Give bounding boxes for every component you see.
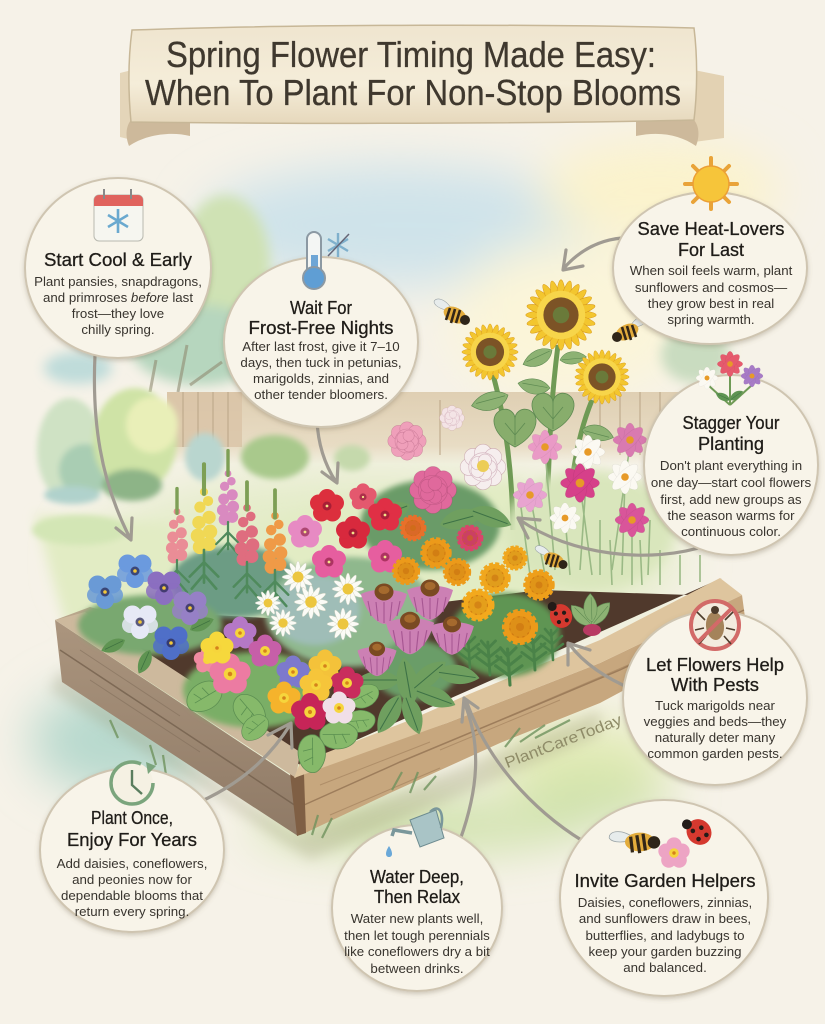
background tree: [44, 195, 729, 385]
body text: spring warmth.: [667, 312, 755, 327]
heading: For Last: [678, 239, 744, 260]
icon: clock with green arrow: [111, 762, 156, 804]
tree trunk: [150, 345, 222, 392]
heading: [67, 807, 197, 850]
scene wash: sky, trees, fence and lawn: [30, 140, 780, 853]
bed ground shadow: [50, 670, 600, 860]
banner right tail: [694, 70, 724, 142]
body text: other tender bloomers.: [254, 387, 388, 402]
body text: and primroses before last: [43, 290, 193, 305]
marigold foliage: [458, 629, 563, 685]
right wood side: [294, 595, 746, 833]
panel: start cool and early: [25, 178, 211, 358]
heading: Frost-Free Nights: [248, 317, 394, 338]
body text: Tuck marigolds near: [655, 698, 776, 713]
panel: invite garden helpers: [560, 800, 768, 996]
title: [145, 34, 681, 113]
body text: first, add new groups as: [660, 492, 802, 507]
arrow: stagger: [518, 518, 708, 555]
body text: one day—start cool flowers: [651, 475, 812, 490]
body text: [578, 895, 752, 975]
primroses: [182, 616, 382, 774]
radish plant: [566, 593, 615, 636]
heading: Start Cool & Early: [44, 249, 193, 270]
body text: between drinks.: [370, 961, 464, 976]
arrow: pests: [568, 643, 634, 690]
body text: Add daisies, coneflowers,: [57, 856, 207, 871]
back left rim: [55, 607, 108, 628]
grass tufts: [110, 720, 570, 838]
arrow: perennials: [190, 723, 292, 806]
body text: [630, 263, 793, 327]
body text: naturally deter many: [655, 730, 776, 745]
pansies: [87, 554, 216, 676]
body text: [651, 458, 812, 539]
lawn patch: [35, 480, 560, 780]
body text: like coneflowers dry a bit: [344, 944, 490, 959]
body text: days, then tuck in petunias,: [240, 355, 402, 370]
body text: keep your garden buzzing: [588, 944, 742, 959]
sunflowers: [462, 280, 629, 530]
heading: [646, 654, 784, 695]
banner body: [129, 25, 697, 123]
banner left tail: [120, 70, 132, 140]
body text: butterflies, and ladybugs to: [586, 928, 744, 943]
foliage base: [78, 480, 560, 728]
panel: stagger your planting: [644, 351, 818, 555]
fence: [167, 392, 692, 464]
arrow: helpers: [466, 700, 593, 847]
arrow: frost free: [317, 420, 338, 483]
body text: Water new plants well,: [351, 911, 483, 926]
body text: dependable blooms that: [61, 888, 203, 903]
body text: then let tough perennials: [344, 928, 490, 943]
heading: Then Relax: [374, 886, 461, 907]
panel: wait for frost-free nights: [224, 232, 418, 427]
heading: Plant Once,: [91, 807, 173, 828]
coneflower foliage: [356, 654, 481, 738]
body text: sunflowers and cosmos—: [635, 280, 788, 295]
heading: Save Heat-Lovers: [638, 218, 784, 239]
heading: Enjoy For Years: [67, 829, 197, 850]
arrows: [94, 238, 708, 847]
body text: and balanced.: [623, 960, 707, 975]
body text: [57, 856, 207, 919]
soil: [85, 578, 722, 765]
petunias: [288, 483, 402, 578]
banner left fold: [127, 120, 190, 146]
icon: crossed-out bug: [691, 601, 739, 649]
icon: watering can: [386, 808, 444, 857]
heading: [370, 866, 464, 907]
body text: they grow best in real: [648, 296, 774, 311]
banner: [120, 25, 724, 146]
arrow: start cool: [94, 355, 132, 540]
heading: Stagger Your: [682, 412, 780, 433]
cosmos patch: [505, 423, 700, 590]
icon: bee, ladybug and flower: [608, 810, 716, 868]
body text: Don't plant everything in: [660, 458, 802, 473]
heading: Invite Garden Helpers: [574, 870, 756, 891]
body text: and sunflowers draw in bees,: [579, 911, 751, 926]
heading: With Pests: [671, 674, 759, 695]
heading: [248, 297, 394, 338]
body text: [644, 698, 787, 761]
body text: [240, 339, 402, 402]
body text: Daisies, coneflowers, zinnias,: [578, 895, 752, 910]
heading: Water Deep,: [370, 866, 464, 887]
body text: [34, 274, 202, 337]
panel: save heat-lovers for last: [613, 158, 807, 344]
garden shrubs: [32, 388, 370, 545]
left wood side: [55, 620, 298, 836]
icon: sun: [685, 158, 737, 209]
body text: and peonies now for: [72, 872, 192, 887]
heading: [682, 412, 780, 454]
daisies: [255, 561, 364, 640]
body text: After last frost, give it 7–10: [242, 339, 400, 354]
body text: continuous color.: [681, 524, 781, 539]
insects in the garden: [434, 299, 648, 631]
banner right fold: [636, 120, 698, 146]
body text: frost—they love: [72, 306, 164, 321]
marigolds and zinnias: [393, 516, 553, 643]
peonies: [366, 406, 515, 534]
wood rims: [55, 612, 300, 778]
raised wooden bed: [50, 578, 746, 860]
body text: common garden pests.: [647, 746, 783, 761]
body text: marigolds, zinnias, and: [253, 371, 389, 386]
body text: When soil feels warm, plant: [630, 263, 793, 278]
heading: Let Flowers Help: [646, 654, 784, 675]
arrow: heat lovers: [563, 238, 622, 270]
body text: the season warms for: [667, 508, 795, 523]
icon: thermometer and crossed snowflake: [303, 232, 349, 289]
watermark: PlantCareToday: [502, 712, 625, 772]
heading: Wait For: [290, 297, 352, 318]
icon: small bouquet: [696, 351, 763, 405]
panel: let flowers help with pests: [623, 601, 807, 785]
panel: water deep, then relax: [332, 808, 502, 991]
corner post: [290, 773, 306, 836]
snapdragons: [165, 451, 288, 606]
panel: plant once, enjoy for years: [40, 762, 224, 932]
body text: veggies and beds—they: [644, 714, 787, 729]
heading: Planting: [698, 433, 764, 454]
coneflowers: [357, 580, 474, 676]
body text: [344, 911, 490, 976]
body text: chilly spring.: [81, 322, 155, 337]
body text: return every spring.: [75, 904, 189, 919]
icon: calendar with snowflake: [94, 189, 143, 241]
heading: [638, 218, 784, 260]
title: Spring Flower Timing Made Easy:: [166, 34, 656, 75]
body text: Plant pansies, snapdragons,: [34, 274, 202, 289]
title: When To Plant For Non-Stop Blooms: [145, 72, 681, 113]
arrow: water: [460, 698, 478, 840]
